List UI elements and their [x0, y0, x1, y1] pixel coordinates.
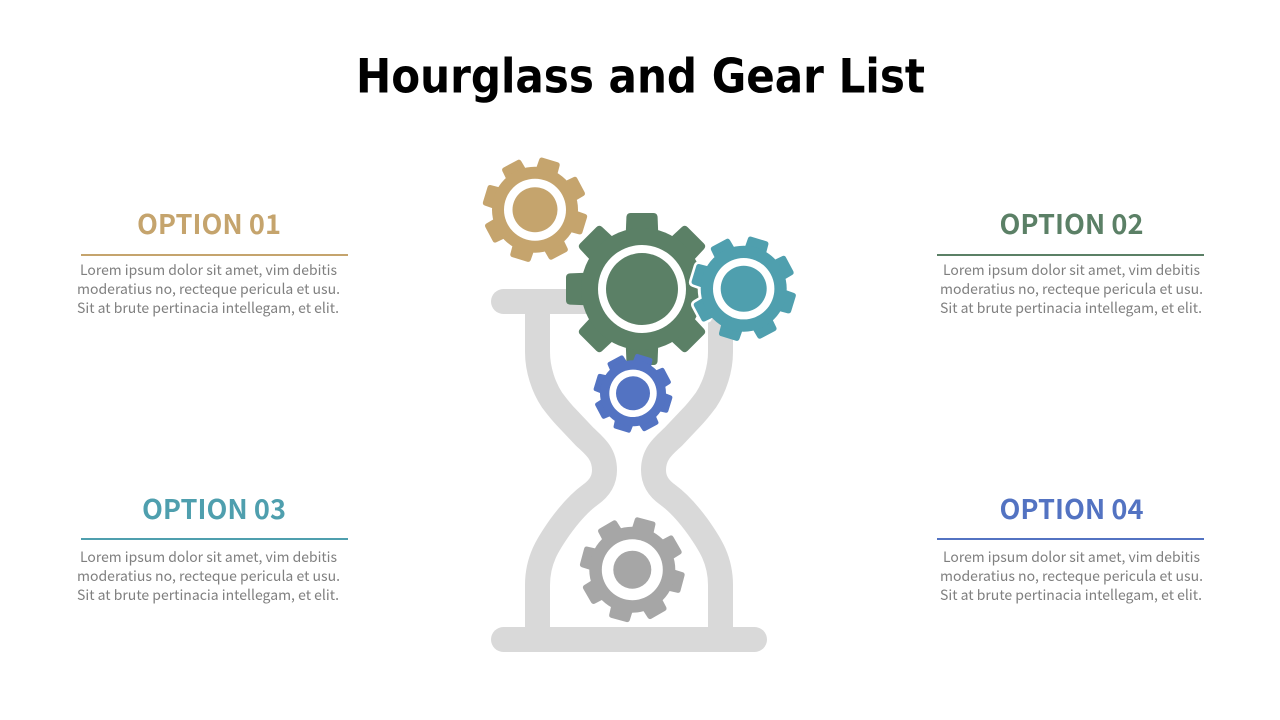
text: option 03 description: Lorem ipsum dolor sit amet, vim debitis	[80, 547, 337, 567]
text: option 04 description	[940, 547, 1203, 605]
icon: green gear	[566, 213, 718, 365]
text: option 02 description: Sit at brute pertinacia intellegam, et elit.	[940, 298, 1202, 318]
text: option 01 description	[77, 260, 340, 318]
title: Hourglass and Gear List	[356, 50, 925, 104]
icon: blue gear	[584, 345, 682, 442]
heading: option 04: OPTION 04	[1000, 488, 1144, 527]
panel: option 01	[77, 203, 348, 318]
panel: option 02	[937, 203, 1204, 318]
icon: white gap between green and teal gears	[688, 262, 712, 322]
icon: tan gear	[470, 145, 600, 275]
text: option 03 description: moderatius no, recteque pericula et usu.	[77, 566, 340, 586]
text: option 01 description: Sit at brute pertinacia intellegam, et elit.	[77, 298, 339, 318]
text: option 01 description: moderatius no, recteque pericula et usu.	[77, 279, 340, 299]
text: option 03 description	[77, 547, 340, 605]
text: option 02 description: moderatius no, recteque pericula et usu.	[940, 279, 1203, 299]
heading: option 01: OPTION 01	[137, 203, 281, 242]
text: option 01 description: Lorem ipsum dolor sit amet, vim debitis	[80, 260, 337, 280]
hourglass	[504, 302, 754, 640]
text: option 04 description: Lorem ipsum dolor sit amet, vim debitis	[943, 547, 1200, 567]
panel: option 04	[937, 488, 1204, 605]
heading: option 02: OPTION 02	[1000, 203, 1144, 242]
text: option 04 description: moderatius no, recteque pericula et usu.	[940, 566, 1203, 586]
heading: option 03: OPTION 03	[142, 488, 286, 527]
text: option 02 description	[940, 260, 1203, 318]
icon: gray gear	[569, 506, 696, 633]
text: option 02 description: Lorem ipsum dolor sit amet, vim debitis	[943, 260, 1200, 280]
text: option 04 description: Sit at brute pertinacia intellegam, et elit.	[940, 585, 1202, 605]
icon: teal gear	[679, 224, 809, 354]
text: option 03 description: Sit at brute pertinacia intellegam, et elit.	[77, 585, 339, 605]
panel: option 03	[77, 488, 348, 605]
